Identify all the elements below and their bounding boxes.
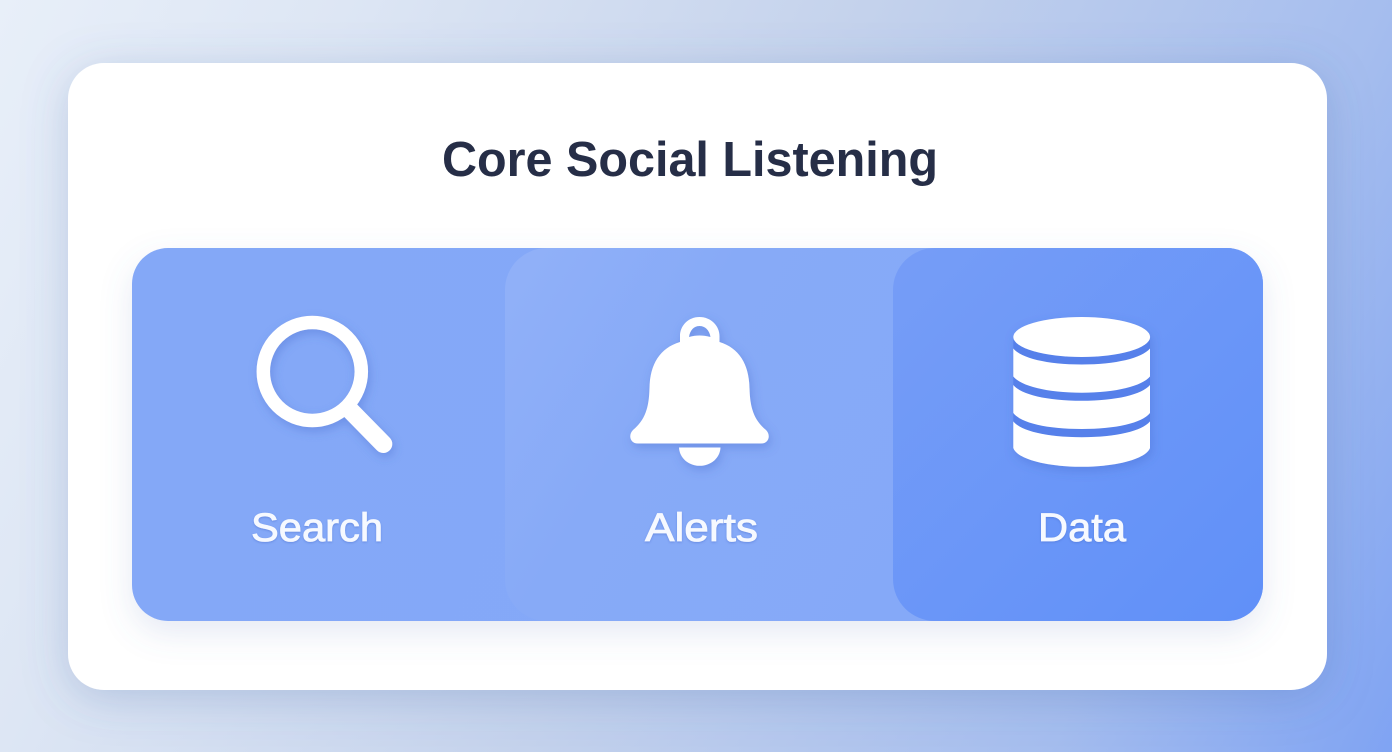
panel: data background (893, 248, 1263, 621)
title: Core Social Listening (442, 133, 938, 187)
panel: white card (68, 63, 1327, 690)
label: data: Data (1038, 506, 1127, 550)
panel: alerts background (505, 248, 937, 621)
panel: search background (132, 248, 1263, 621)
icon: magnifying glass (263, 322, 383, 444)
icon: database (1013, 317, 1150, 467)
label: search: Search (251, 506, 383, 550)
label: alerts: Alerts (645, 506, 758, 550)
panel: feature strip (132, 248, 1263, 621)
icon: bell (630, 317, 769, 466)
